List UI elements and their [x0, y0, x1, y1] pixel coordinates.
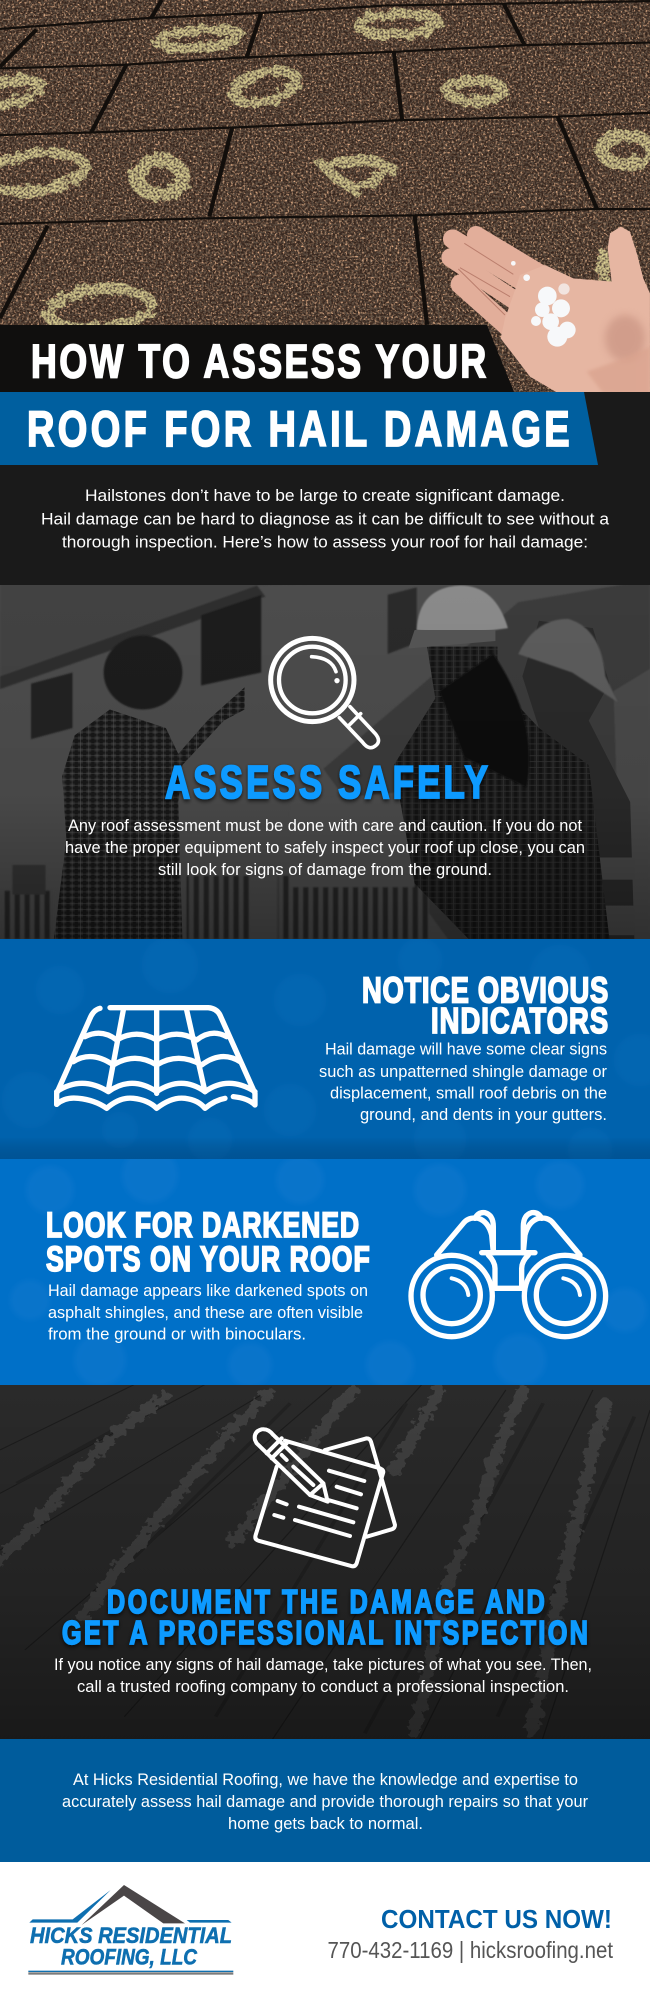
- intro text: Hailstones don’t have to be large to create significant damage.: [85, 486, 565, 505]
- body text: [54, 1655, 592, 1696]
- heading: look for darkened spots: [46, 1205, 370, 1279]
- body text: have the proper equipment to safely inspect your roof up close, you can: [65, 838, 585, 857]
- body text: still look for signs of damage from the ground.: [158, 860, 492, 879]
- closing text: [62, 1770, 588, 1833]
- title band: black: [0, 325, 514, 392]
- heading: document the damage: [62, 1584, 588, 1652]
- body text: ground, and dents in your gutters.: [360, 1105, 607, 1124]
- icon: magnifying glass: [271, 638, 378, 748]
- fingers: [451, 235, 540, 327]
- heading: look for darkened spots: SPOTS ON YOUR ROOF: [46, 1239, 370, 1279]
- heading: notice obvious indicators: [362, 970, 608, 1041]
- contact heading: CONTACT US NOW!: [381, 1904, 612, 1934]
- heading: assess safely: ASSESS SAFELY: [165, 756, 488, 808]
- closing text: home gets back to normal.: [228, 1814, 423, 1833]
- title line 1: HOW TO ASSESS YOUR: [31, 335, 486, 388]
- person: woman in hard hat: [394, 586, 609, 939]
- intro text: [41, 486, 610, 552]
- closing text: accurately assess hail damage and provide thorough repairs so that your: [62, 1792, 588, 1811]
- person: man pointing: [54, 636, 245, 939]
- body text: Any roof assessment must be done with care and caution. If you do not: [68, 816, 582, 835]
- photo: roof inspectors: [0, 580, 650, 950]
- panel: notice obvious indicators: [0, 937, 650, 1172]
- body text: asphalt shingles, and these are often visible: [48, 1303, 363, 1322]
- panel: look for darkened spots: [0, 1147, 650, 1389]
- body text: Hail damage will have some clear signs: [325, 1040, 607, 1058]
- footer: [0, 1862, 650, 2000]
- body text: [65, 816, 585, 879]
- roof shingle seams: [0, 0, 650, 325]
- panel: assess safely: [0, 580, 650, 950]
- icon: hand holding hailstones: [451, 227, 650, 395]
- chalk circles around hail damage: [0, 12, 650, 333]
- title band: blue: [0, 392, 598, 465]
- heading: notice obvious indicators: NOTICE OBVIOUS: [362, 970, 608, 1010]
- palm: [501, 227, 650, 395]
- person: third inspector: [518, 619, 634, 939]
- logo: Hicks Residential Roofing: ROOFING, LLC: [61, 1944, 198, 1970]
- body text: such as unpatterned shingle damage or: [319, 1062, 607, 1081]
- body text: from the ground or with binoculars.: [48, 1324, 306, 1344]
- heading: look for darkened spots: LOOK FOR DARKENED: [46, 1205, 359, 1245]
- hailstones: [511, 261, 576, 347]
- icon: roof tiles: [57, 1008, 255, 1108]
- heading: document the damage: DOCUMENT THE DAMAGE AND: [107, 1584, 545, 1621]
- body text: [48, 1281, 368, 1344]
- body text: [319, 1040, 607, 1124]
- body text: call a trusted roofing company to conduct a professional inspection.: [77, 1677, 569, 1696]
- panel: closing statement: [0, 1739, 650, 1862]
- title line 2: ROOF FOR HAIL DAMAGE: [27, 402, 570, 457]
- icon: binoculars: [411, 1213, 606, 1337]
- closing text: At Hicks Residential Roofing, we have the knowledge and expertise to: [73, 1770, 578, 1789]
- body text: If you notice any signs of hail damage, take pictures of what you see. Then,: [54, 1655, 592, 1674]
- heading: document the damage: GET A PROFESSIONAL INTSPECTION: [62, 1615, 588, 1652]
- contact details: 770-432-1169 | hicksroofing.net: [328, 1937, 614, 1963]
- photo: damaged roof tiles: [0, 1383, 650, 1750]
- header photo: hail marked roof: [0, 0, 650, 392]
- heading: notice obvious indicators: INDICATORS: [431, 1000, 608, 1041]
- body text: displacement, small roof debris on the: [330, 1084, 607, 1102]
- panel: document the damage: [0, 1383, 650, 1750]
- logo: Hicks Residential Roofing: [28, 1885, 233, 1975]
- icon: notes and pencil: [255, 1429, 395, 1566]
- logo: Hicks Residential Roofing: HICKS RESIDENTIAL: [30, 1923, 232, 1948]
- intro text: Hail damage can be hard to diagnose as it can be difficult to see without a: [41, 510, 610, 528]
- body text: Hail damage appears like darkened spots on: [48, 1281, 368, 1300]
- dark intro background: [0, 392, 650, 585]
- intro text: thorough inspection. Here’s how to assess your roof for hail damage:: [62, 532, 588, 552]
